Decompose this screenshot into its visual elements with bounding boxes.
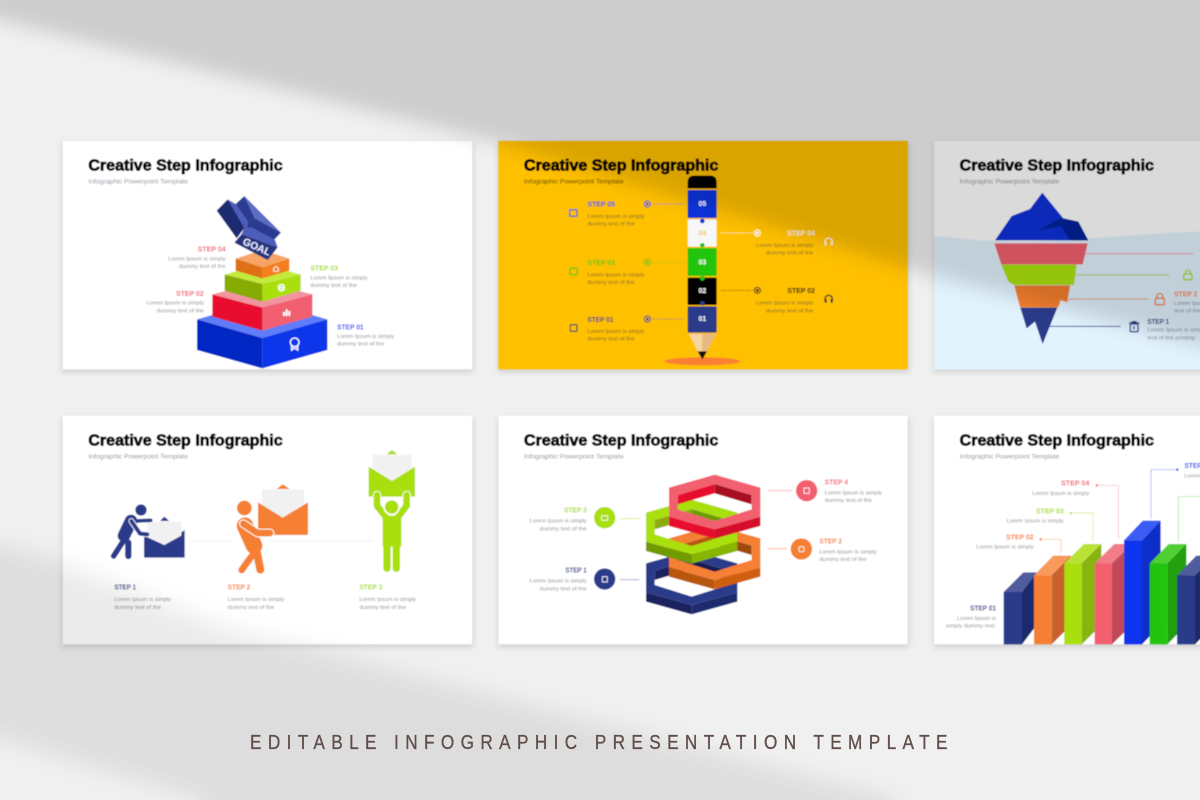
label: step 04: Lorem Ipsum is simply [756,243,814,249]
callout lines [1041,470,1200,553]
label: step 03: STEP 03 [587,260,615,267]
subheading: Infographic Powerpoint Template [524,178,624,185]
subheading: Infographic Powerpoint Template [960,178,1060,185]
heading: Creative Step Infographic [88,433,283,450]
pencil shadow ellipse [664,357,740,365]
label: step 03: Lorem Ipsum is simply [310,275,368,281]
label: step 05: STEP 05 [587,202,615,209]
label: step 05: Lorem Ipsum is simply [587,214,645,220]
label: step 2 [1174,292,1200,315]
label: step 01: Lorem Ipsum is [957,616,996,622]
label: step 2 [228,585,285,611]
label: step 1 [1147,319,1200,342]
subheading: Infographic Powerpoint Template [960,453,1060,460]
label: step 02: STEP 02 [787,288,815,295]
label: step 3: dummy text of the [359,605,406,611]
label: step 04 [1032,481,1098,497]
slide surface [63,141,472,369]
water [934,232,1200,369]
panel: stacked hexagons slide [498,416,908,644]
label: step 04 [722,230,833,257]
bar orange [1034,556,1071,644]
icon: award ribbon [290,338,299,350]
slide surface [934,416,1200,644]
pyramid tier 2 red [212,282,312,331]
figure 1 navy pushing envelope [114,504,185,558]
icon: bar chart [283,309,290,316]
label: step 1: STEP 1 [114,585,136,592]
hexagon navy [646,550,737,614]
slide surface [934,141,1200,369]
label: step 1: dummy text of the [114,605,161,611]
pyramid tier 3 green [225,263,301,302]
pyramid tier 4 orange [236,250,289,278]
pencil: 04 [698,230,706,237]
label: step 01 [570,316,683,343]
heading: Creative Step Infographic [960,158,1154,175]
bar lime [1064,544,1101,644]
label: step 01: simply dummy text. [946,624,996,630]
label: step 01: dummy text of the [337,342,384,348]
label: step 01: STEP 01 [337,324,364,331]
label: step 05: dummy text of the [587,222,635,228]
iceberg [994,193,1088,344]
label: step 04: STEP 04 [1061,481,1089,488]
bar navy [1004,572,1037,644]
figure 2 orange carrying envelope [237,484,308,570]
callout: step 4 [767,480,882,504]
label: step 04: STEP 04 [787,230,815,237]
label: step 02: STEP 02 [176,291,204,298]
label: step 2: Lorem Ipsum is simply [228,597,285,603]
callout: step 2: STEP 2 [819,538,842,545]
label: step 03: STEP 03 [1036,508,1064,515]
pencil: 03 [698,259,706,266]
label: step 03 [1007,508,1072,525]
pyramid tier 1 blue [197,301,327,368]
callout: step 3 [530,507,640,532]
label: step 01 [337,324,395,348]
heading: Creative Step Infographic [524,158,718,175]
callout: step 3: STEP 3 [564,508,587,515]
label: step 03 [310,266,368,289]
label: step 02: Lorem Ipsum is simply [147,301,204,307]
callout: step 1: STEP 1 [565,568,587,575]
heading: Creative Step Infographic [524,433,718,450]
goal arrow [217,196,281,260]
label: step 01 [946,605,996,630]
goal arrow: GOAL [241,237,272,259]
label: step 02 [722,287,833,314]
label: step 04: Lorem Ipsum is simply [168,256,226,262]
label: step 2: STEP 2 [228,585,250,592]
label: step 02: Lorem Ipsum is simply [976,545,1034,551]
pencil [688,176,717,359]
icon: trash [1129,322,1139,332]
icon: globe [278,284,285,291]
callout: step 4: Lorem Ipsum is simply [825,490,882,496]
figure 3 lime lifting envelope [369,450,415,568]
callout: step 3: dummy text of the [540,526,587,532]
label: step 02: STEP 02 [1006,534,1034,541]
label: step 1: Lorem Ipsum is simply [1147,328,1200,334]
label: step 05 [1176,463,1200,480]
label: step 04: dummy text of the [179,264,226,270]
icon: home [273,266,279,271]
label: step 01: STEP 01 [587,317,613,324]
slide surface [498,416,908,644]
label: step 02 [976,534,1042,551]
slide drop shadows [62,143,1200,647]
subheading: Infographic Powerpoint Template [88,453,189,460]
label: step 02: Lorem Ipsum is simply [756,301,814,307]
label: step 02: dummy text of the [766,308,813,314]
label: step 1: Lorem Ipsum is simply [114,597,171,603]
callout: step 3: Lorem Ipsum is simply [530,519,587,525]
hexagon lime [646,500,737,564]
subheading: Infographic Powerpoint Template [88,178,189,185]
callout: step 4: STEP 4 [825,480,848,487]
label: step 04: STEP 04 [198,246,226,253]
label: step 03 [570,259,683,286]
icon: orange lock [1155,293,1164,305]
pencil: 02 [698,288,706,295]
panel: pencil slide [498,141,908,369]
callout: step 1: dummy text of the [540,586,587,592]
label: step 1: text of the printing [1147,336,1195,342]
icon: green lock [1184,270,1192,280]
label: step 05 [570,201,683,228]
panel: iceberg slide [934,141,1200,369]
label: step 2: dummy text of the [228,605,274,611]
label: step 03: dummy text of the [587,280,635,286]
footer headline: EDITABLE INFOGRAPHIC PRESENTATION TEMPLATE [250,731,947,753]
label: step 03: Lorem Ipsum is simply [587,272,645,278]
label: step 02: dummy text of the [157,308,204,314]
callout: step 2: dummy text of the [819,557,867,563]
label: step 2: STEP 2 [1174,292,1197,299]
label: step 03: STEP 03 [310,266,338,273]
subheading: Infographic Powerpoint Template [524,453,624,460]
callout: step 1: Lorem Ipsum is simply [530,579,587,585]
bar red [1095,544,1132,644]
label: step 04: dummy text of the [766,251,813,257]
pointer lines [1049,254,1193,326]
label: step 01: STEP 01 [970,605,996,612]
label: step 01: dummy text of the [587,337,635,343]
slide surface [498,141,908,369]
label: step 01: Lorem Ipsum is simply [587,329,645,335]
callout: step 2: Lorem Ipsum is simply [819,549,877,555]
label: step 1: STEP 1 [1147,319,1169,326]
bar navy right [1177,556,1200,644]
label: step 01: Lorem Ipsum is simply [337,334,395,340]
callout: step 4: dummy text of the [825,498,872,504]
bar green [1150,544,1186,644]
label: step 1 [114,585,171,611]
pencil: 01 [698,316,706,323]
connector lines [192,539,373,542]
label: step 03: Lorem Ipsum is simply [1007,519,1064,525]
label: step 03: dummy text of the [310,283,357,289]
label: step 3: STEP 3 [359,585,382,592]
panel: pyramid goal slide [63,141,472,369]
pencil: 05 [698,201,706,208]
label: step 02 [147,291,204,314]
label: step 04 [168,246,226,270]
hexagon red [669,475,760,539]
hexagon orange [669,525,760,589]
panel: envelope figures slide [63,416,472,644]
label: step 04: Lorem Ipsum is simply [1032,491,1090,497]
bar blue [1124,521,1161,644]
callout: step 2 [767,538,877,563]
callout: step 1 [530,568,639,592]
panel: 3d bars slide [934,416,1200,644]
heading: Creative Step Infographic [88,158,283,175]
heading: Creative Step Infographic [960,433,1154,450]
label: step 3 [359,585,416,611]
label: step 3: Lorem Ipsum is simply [359,597,416,603]
slide surface [63,416,472,644]
